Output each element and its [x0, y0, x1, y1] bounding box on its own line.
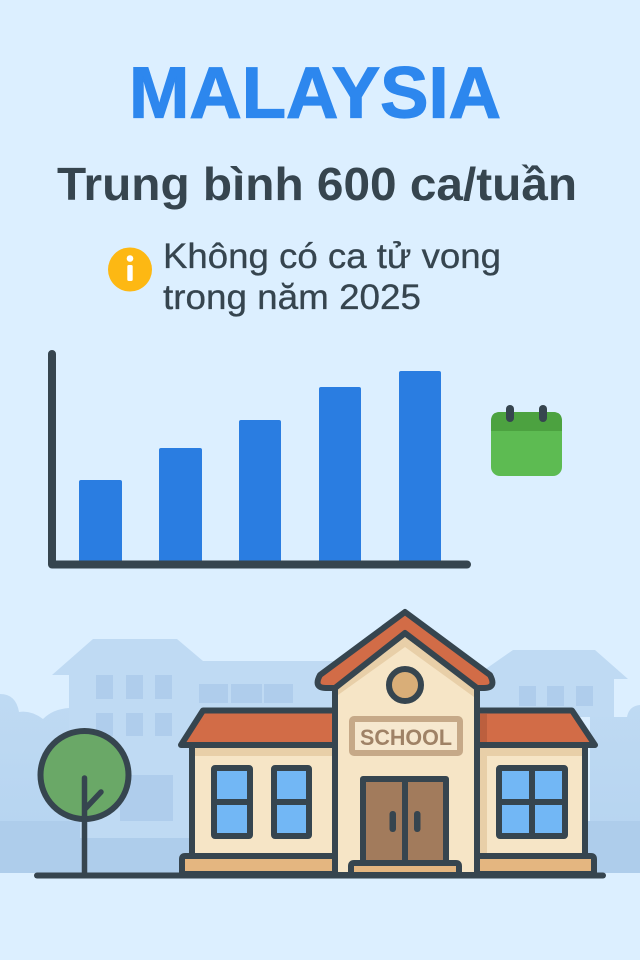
left wing [181, 710, 336, 874]
right building [480, 650, 628, 717]
ground band [0, 821, 340, 873]
bar chart [52, 354, 467, 564]
background: city silhouette [0, 639, 640, 873]
icon: info [108, 248, 152, 292]
school [181, 612, 595, 875]
text block: no deaths note [163, 237, 501, 317]
doorstep [351, 863, 459, 875]
central block [318, 612, 492, 875]
ground line [37, 872, 603, 878]
window [274, 768, 309, 836]
door [363, 779, 446, 865]
right bush [590, 705, 640, 873]
school sign [352, 719, 460, 753]
school sign: SCHOOL [360, 725, 452, 750]
text block: no deaths note: trong năm 2025 [163, 278, 421, 317]
title: MALAYSIA [129, 54, 501, 134]
window [499, 768, 565, 836]
gable roof [318, 612, 492, 688]
left building [52, 639, 340, 873]
right wing [474, 710, 595, 874]
tree [40, 731, 128, 875]
building windows [96, 675, 593, 821]
text block: no deaths note: Không có ca tử vong [163, 237, 501, 276]
bars [79, 371, 441, 562]
window [214, 768, 250, 836]
axes [52, 354, 467, 564]
icon: calendar [491, 405, 562, 476]
bushes [0, 694, 69, 873]
subtitle: Trung bình 600 ca/tuần [57, 158, 577, 210]
round window [389, 669, 421, 701]
